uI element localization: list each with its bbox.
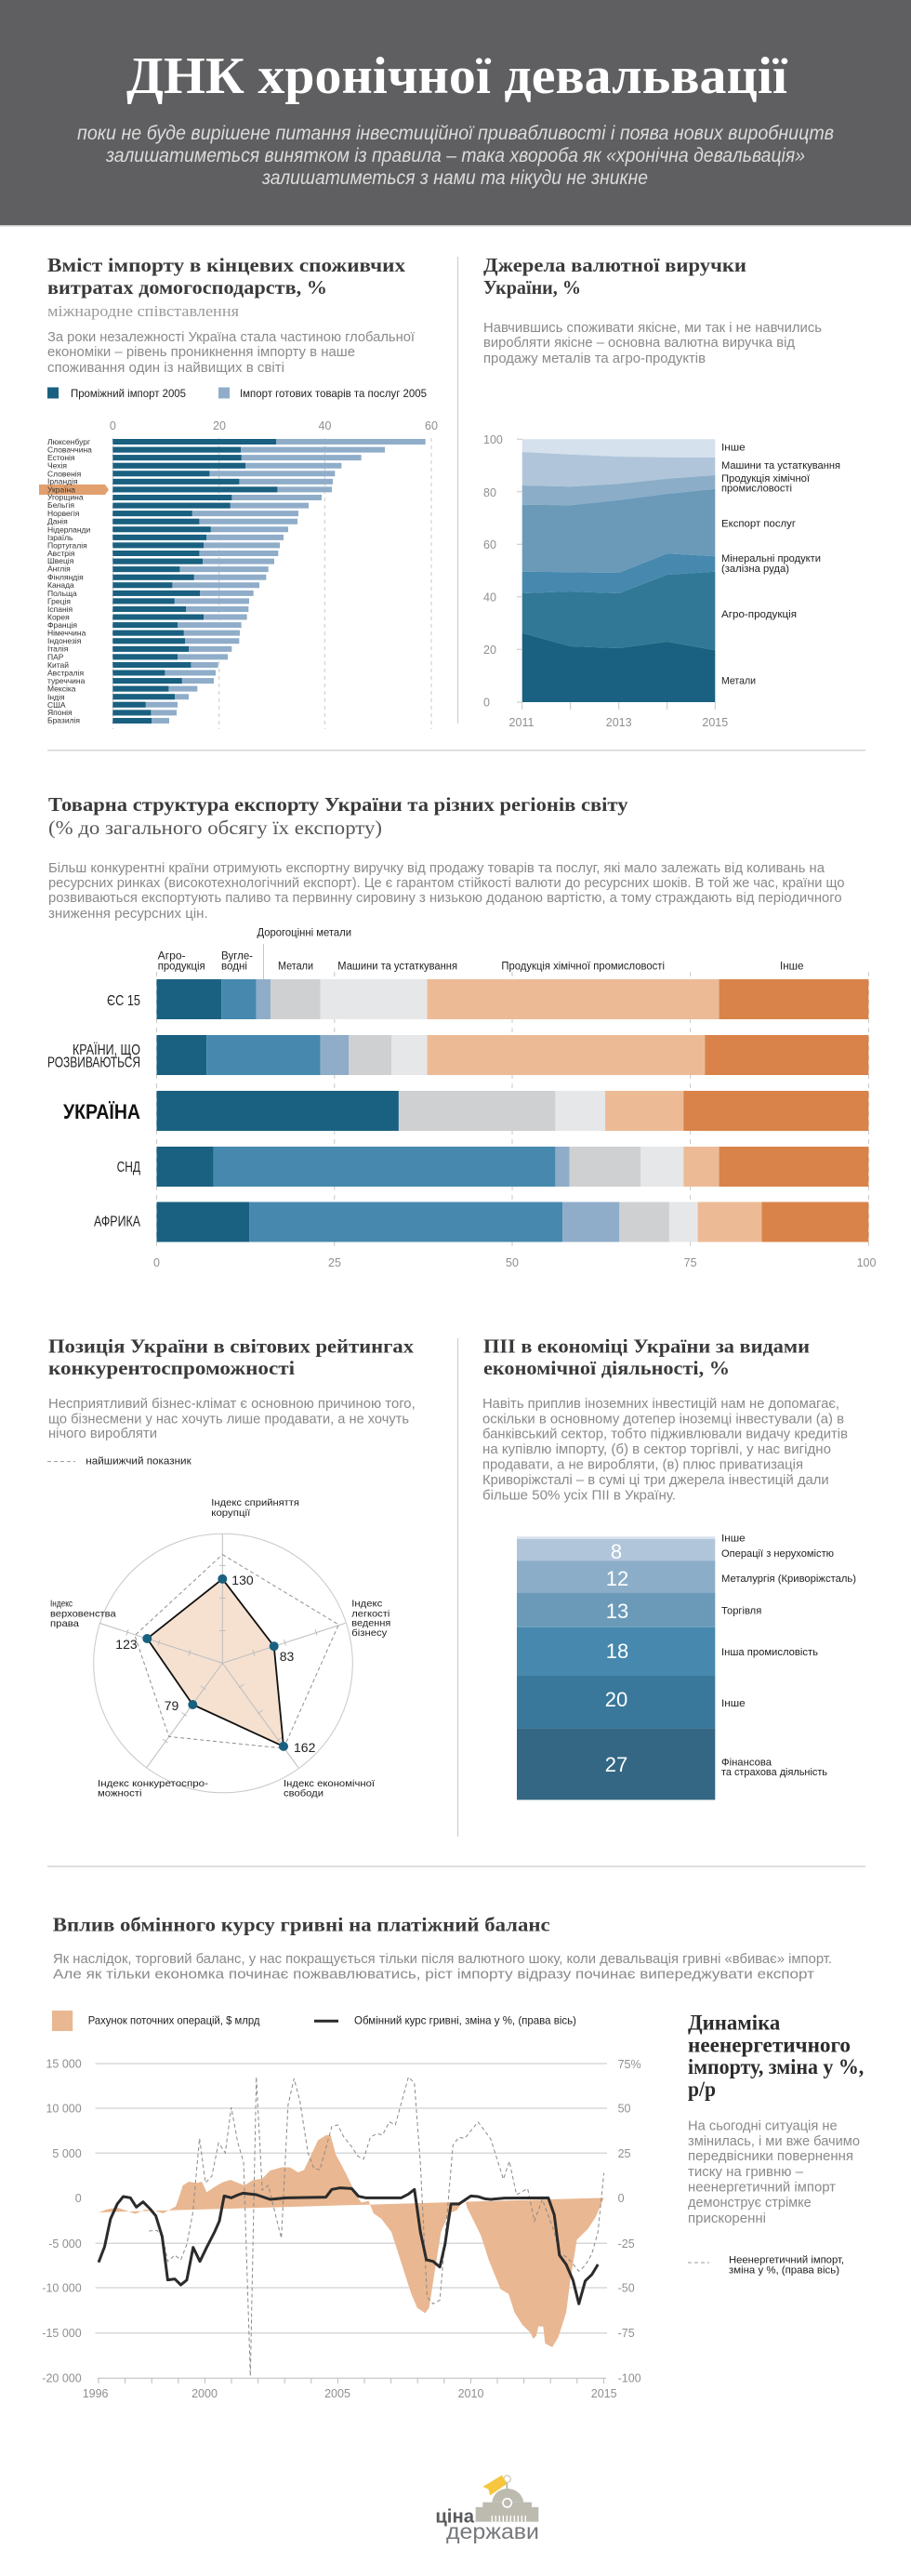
axis labels: легкості <box>351 1609 389 1620</box>
side text: змінилась, і ми вже бачимо <box>688 2134 860 2149</box>
values: 8 <box>611 1540 622 1563</box>
intro text: Більш конкурентні країни отримують експортну виручку від продажу товарів та послуг, які мало залежать від коливань на <box>48 861 825 876</box>
country labels: Угорщина <box>47 493 84 502</box>
x axis labels: 2005 <box>324 2387 350 2400</box>
column labels <box>158 928 803 979</box>
value labels: 83 <box>280 1649 294 1664</box>
series labels: Метали <box>721 675 756 686</box>
axis labels: 25 <box>328 1256 341 1269</box>
panel: FDI by activity <box>482 1334 856 1799</box>
category labels: та страхова діяльність <box>721 1767 827 1778</box>
intro text <box>53 1952 832 1983</box>
x axis labels: 2013 <box>606 716 632 729</box>
series labels: Експорт послуг <box>721 519 796 530</box>
heading: non-energy imports: імпорту, зміна у %, <box>688 2055 864 2078</box>
subheading: міжнародне співставлення <box>47 302 239 320</box>
country labels: США <box>47 700 66 710</box>
country labels: ПАР <box>47 652 64 661</box>
x axis labels <box>83 2387 617 2400</box>
panel: non-energy import dynamics <box>688 2012 864 2277</box>
y axis labels: 60 <box>483 538 496 551</box>
intro text <box>48 1397 416 1441</box>
area: current account <box>99 2135 604 2347</box>
y axis labels: 40 <box>483 591 496 604</box>
category labels: Інша промисловість <box>721 1647 818 1658</box>
axis labels: права <box>50 1618 79 1629</box>
country labels: Японія <box>47 708 73 717</box>
axis labels <box>50 1497 390 1799</box>
country labels: Італія <box>47 644 69 654</box>
side text <box>688 2119 860 2226</box>
category labels: Торгівля <box>721 1605 761 1616</box>
heading: import content: витратах домогосподарств, % <box>47 276 327 299</box>
column labels: Вугле- <box>221 951 253 963</box>
combined line and area chart <box>42 2057 641 2400</box>
x axis labels: 2015 <box>591 2387 617 2400</box>
column labels: Продукція хімічної промисловості <box>501 962 665 973</box>
right axis labels: 25 <box>618 2147 631 2160</box>
heading: export structure: (% до загального обсягу їх експорту) <box>48 817 382 839</box>
y axis labels: 0 <box>483 696 490 709</box>
heading: export structure: Товарна структура експорту України та різних регіонів світу <box>48 793 628 816</box>
country labels: Корея <box>47 613 70 622</box>
panel: sources of foreign currency <box>483 254 840 729</box>
intro text: продавати, а не виробляти, (в) плюс приватизація <box>482 1457 803 1472</box>
category labels: Фінансова <box>721 1758 772 1769</box>
axis labels: 0 <box>153 1256 160 1269</box>
category labels: Операції з нерухомістю <box>721 1548 834 1560</box>
line: hryvnia exchange rate <box>99 2188 598 2304</box>
panel: export structure <box>47 793 876 1269</box>
legend: Імпорт готових товарів та послуг 2005 <box>240 387 427 400</box>
country labels: Індія <box>47 692 65 701</box>
axis labels: свободи <box>284 1787 323 1799</box>
series labels: промисловості <box>721 484 792 495</box>
value labels: 162 <box>294 1740 316 1755</box>
values: 12 <box>606 1567 628 1590</box>
axis labels: ведення <box>351 1618 390 1629</box>
heading: non-energy imports: Динаміка <box>688 2012 781 2035</box>
right axis labels: 75% <box>618 2058 641 2071</box>
country labels: Канада <box>47 580 74 590</box>
x axis labels: 1996 <box>83 2387 109 2400</box>
axis labels: корупції <box>211 1507 250 1519</box>
country labels: Бразилія <box>47 716 80 725</box>
series labels: Мінеральні продукти <box>721 553 821 564</box>
country labels <box>47 437 92 725</box>
right axis labels <box>618 2058 641 2384</box>
axis labels: 50 <box>506 1256 519 1269</box>
legend: Рахунок поточних операцій, $ млрд <box>88 2014 260 2027</box>
icon: price tag <box>482 2476 510 2495</box>
country labels: Люксенбург <box>47 437 90 446</box>
legend: Обмінний курс гривні, зміна у %, (права вісь) <box>354 2014 576 2027</box>
legend: dashed line: Неенергетичний імпорт, <box>729 2254 844 2265</box>
country labels: Фінляндія <box>47 572 84 581</box>
intro text: За роки незалежності Україна стала частиною глобальної <box>47 330 415 345</box>
column labels: водні <box>221 962 247 973</box>
series labels <box>721 443 840 686</box>
x axis labels: 2010 <box>458 2387 483 2400</box>
axis labels: Індекс сприйняття <box>211 1497 299 1508</box>
icon: parliament building <box>476 2483 538 2522</box>
left axis labels: -5 000 <box>48 2237 82 2251</box>
panel: import content in household spending <box>39 254 438 729</box>
right axis labels: 50 <box>618 2102 631 2115</box>
stacked column chart <box>517 1533 856 1799</box>
dashed line: non-energy imports <box>149 2077 604 2376</box>
side text: тиску на гривню – <box>688 2165 804 2180</box>
row labels: КРАЇНИ, ЩО <box>73 1042 140 1058</box>
heading: FDI: ПІІ в економіці України за видами <box>483 1334 810 1357</box>
heading: FDI <box>483 1334 810 1379</box>
intro text: зниження ресурсних цін. <box>48 907 208 922</box>
intro text: Криворіжсталі – в сумі ці три джерела інвестицій дали <box>482 1473 829 1488</box>
country labels: Естонія <box>47 453 75 462</box>
axis labels: Індекс економічної <box>284 1778 375 1789</box>
bar chart: import share by country: 0 <box>110 419 116 432</box>
left axis labels: 10 000 <box>46 2102 82 2115</box>
intro text: Навіть приплив іноземних інвестицій нам не допомагає, <box>482 1397 839 1412</box>
heading: exchange rate impact: Вплив обмінного курсу гривні на платіжний баланс <box>53 1914 550 1936</box>
axis labels: Індекс конкуретоспро- <box>98 1778 209 1789</box>
column labels: Дорогоцінні метали <box>257 928 351 939</box>
legend: Проміжний імпорт 2005 <box>71 387 186 400</box>
title: ДНК хронічної девальвації <box>126 47 787 105</box>
country labels: Австрія <box>47 549 75 558</box>
y axis labels: 80 <box>483 486 496 499</box>
intro text: Але як тільки економка починає пожвавлюватись, ріст імпорту відразу починає випереджувати експорт <box>53 1968 814 1983</box>
stacked bar chart <box>47 972 876 1269</box>
x axis labels: 2000 <box>191 2387 218 2400</box>
country labels: Данія <box>47 517 68 526</box>
value labels: 130 <box>231 1573 254 1587</box>
intro text: Як наслідок, торговий баланс, у нас покращується тільки після валютного шоку, коли девальвація гривні «вбиває» імпорт. <box>53 1952 832 1967</box>
intro text: ресурсних ринках (високотехнологічний експорт). Це є гарантом стійкості валюти до ресурсних шоків. В той же час, країни що <box>48 876 844 891</box>
heading: rankings: конкурентоспроможності <box>48 1357 295 1379</box>
bar: Africa <box>156 1202 868 1242</box>
intro text: Навчившись споживати якісне, ми так і не навчились <box>483 321 822 336</box>
legend <box>52 2011 576 2031</box>
values <box>605 1540 628 1776</box>
axis labels: Індекс <box>351 1598 382 1609</box>
subtitle: залишатиметься з нами та нікуди не зникне <box>261 167 648 189</box>
values: 20 <box>605 1688 627 1711</box>
series labels: Продукція хімічної <box>721 473 810 485</box>
country labels: Ізраїль <box>47 533 73 542</box>
legend: dashed line: зміна у %, (права вісь) <box>729 2265 839 2277</box>
bar: EU 15 <box>156 979 868 1019</box>
heading: non-energy imports <box>688 2012 864 2101</box>
intro text: більше 50% усіх ПІІ в Україну. <box>482 1488 676 1503</box>
side text: прискоренні <box>688 2211 766 2226</box>
row labels: АФРИКА <box>94 1215 140 1229</box>
left axis labels <box>42 2057 82 2384</box>
intro text <box>483 321 822 366</box>
axis labels: 100 <box>857 1256 876 1269</box>
intro text: виробляти якісне – основна валютна виручка від <box>483 336 796 351</box>
legend: dashed line <box>688 2254 844 2277</box>
country labels: Мексіка <box>47 684 76 694</box>
side text: неенергетичний імпорт <box>688 2181 836 2196</box>
left axis labels: -20 000 <box>42 2371 82 2384</box>
axis labels: верховенства <box>50 1609 116 1620</box>
intro text <box>47 330 415 376</box>
bar chart: import share by country: 60 <box>425 419 438 432</box>
intro text: оскільки в основному дотепер іноземці інвестували (а) в <box>482 1412 844 1427</box>
heading: currency sources <box>483 254 746 299</box>
panel: competitiveness rankings <box>47 1334 416 1799</box>
country labels: Польща <box>47 589 77 598</box>
bar chart: import share by country: 40 <box>319 419 331 432</box>
x axis labels: 2011 <box>509 716 534 729</box>
country labels: Китай <box>47 660 69 670</box>
column labels: Інше <box>780 962 803 973</box>
heading: FDI: економічної діяльності, % <box>483 1357 730 1379</box>
right axis labels: -50 <box>618 2282 635 2295</box>
x axis labels <box>509 716 728 729</box>
values: 18 <box>606 1640 628 1663</box>
heading: non-energy imports: р/р <box>688 2078 716 2101</box>
heading: rankings: Позиція України в світових рейтингах <box>48 1334 415 1357</box>
country labels: Чехія <box>47 461 67 471</box>
value labels: 79 <box>165 1698 178 1713</box>
country labels: Норвегія <box>47 509 80 518</box>
intro text: Несприятливий бізнес-клімат є основною причиною того, <box>48 1397 416 1412</box>
intro text: продажу металів та агро-продуктів <box>483 352 706 366</box>
heading: non-energy imports: неенергетичного <box>688 2034 851 2057</box>
series labels: Агро-продукція <box>721 609 797 620</box>
country labels: Англія <box>47 564 71 574</box>
country labels: Португалія <box>47 540 87 550</box>
intro text <box>48 861 844 922</box>
column labels: Агро- <box>158 951 186 963</box>
right axis labels: -25 <box>618 2237 635 2251</box>
radar chart <box>50 1497 390 1799</box>
bar: Ukraine <box>156 1091 868 1131</box>
axis labels: 75 <box>684 1256 697 1269</box>
row labels: РОЗВИВАЮТЬСЯ <box>47 1055 140 1071</box>
heading: import content: Вміст імпорту в кінцевих споживчих <box>47 254 406 276</box>
heading: currency sources: Джерела валютної виручки <box>483 254 746 276</box>
y axis labels: 100 <box>483 433 503 446</box>
category labels: Металургія (Криворіжсталь) <box>721 1573 856 1585</box>
subtitle <box>77 123 834 189</box>
intro text: нічого виробляти <box>48 1427 157 1441</box>
heading: export structure <box>48 793 628 839</box>
right axis labels: 0 <box>618 2192 625 2205</box>
intro text: розвиваються експортують паливо та первинну сировину з низькою доданою вартістю, а тому страждають від періодичного <box>48 891 842 906</box>
country labels: Нідерланди <box>47 524 90 534</box>
wordmark: держави <box>446 2519 539 2543</box>
column labels: Метали <box>278 962 313 973</box>
axis labels <box>153 1256 876 1269</box>
column labels: Машини та устаткування <box>337 962 457 973</box>
highlight: Ukraine <box>39 485 109 495</box>
country labels: Україна <box>47 485 75 494</box>
value labels <box>115 1573 316 1755</box>
logo <box>435 2476 539 2543</box>
country labels: туреччина <box>47 676 86 685</box>
side text: передвісники повернення <box>688 2149 853 2164</box>
row labels: УКРАЇНА <box>63 1100 140 1123</box>
right axis labels: -100 <box>618 2371 641 2384</box>
country labels: Австралія <box>47 669 85 678</box>
intro text: на купівлю імпорту, (б) в сектор торгівлі, у нас вигідно <box>482 1442 831 1457</box>
values: 13 <box>606 1600 628 1623</box>
stacked area chart <box>483 433 840 729</box>
row labels: СНД <box>117 1160 140 1175</box>
heading: currency sources: України, % <box>483 276 581 299</box>
heading: rankings <box>48 1334 415 1379</box>
dashed worst-value outline <box>135 1555 338 1748</box>
y axis labels <box>483 433 503 709</box>
axis labels: бізнесу <box>351 1627 388 1639</box>
bar chart: import share by country <box>39 419 438 729</box>
intro text: що бізнесмени у нас хочуть лише продавати, а не хочуть <box>48 1412 409 1427</box>
country labels: Індонезія <box>47 636 82 645</box>
left axis labels: 15 000 <box>46 2057 82 2070</box>
intro text: банківський сектор, тобто підживлювали видачу кредитів <box>482 1427 848 1441</box>
country labels: Словенія <box>47 469 82 478</box>
row labels: ЄС 15 <box>107 993 140 1009</box>
country labels: Франція <box>47 620 77 630</box>
side text: На сьогодні ситуація не <box>688 2119 838 2134</box>
value labels: 123 <box>115 1637 138 1652</box>
panel: exchange rate and balance of payments <box>42 1914 832 2400</box>
side text: демонструє стрімке <box>688 2196 812 2211</box>
series labels: Машини та устаткування <box>721 460 840 471</box>
country labels: Швеція <box>47 556 74 565</box>
subtitle: поки не буде вирішене питання інвестиційної привабливості і поява нових виробництв <box>77 123 834 144</box>
category labels <box>721 1533 856 1778</box>
x axis labels: 2015 <box>702 716 728 729</box>
legend: найшижчий показник <box>86 1456 191 1467</box>
subtitle: залишатиметься винятком із правила – така хвороба як «хронічна девальвація» <box>105 145 805 166</box>
series labels: (залізна руда) <box>721 564 789 575</box>
heading: import content <box>47 254 406 299</box>
values: 27 <box>605 1753 627 1776</box>
country labels: Ірландія <box>47 476 78 485</box>
intro text: споживання один із найвищих в світі <box>47 361 284 376</box>
Ukraine outline <box>147 1579 284 1746</box>
axis labels: можності <box>98 1787 141 1799</box>
category labels: Інше <box>721 1698 746 1709</box>
axis labels: Індекс <box>50 1598 73 1609</box>
legend <box>47 387 427 400</box>
intro text <box>482 1397 848 1503</box>
right axis labels: -75 <box>618 2327 635 2340</box>
left axis labels: -15 000 <box>42 2327 82 2340</box>
country labels: Бельгія <box>47 500 74 510</box>
header banner <box>0 0 911 227</box>
data points <box>142 1574 288 1751</box>
left axis labels: -10 000 <box>42 2282 82 2295</box>
country labels: Іспанія <box>47 604 73 614</box>
category labels: Інше <box>721 1533 746 1544</box>
row labels <box>47 993 140 1229</box>
wordmark: ціна <box>435 2505 474 2527</box>
series labels: Інше <box>721 443 746 454</box>
bar: developing countries <box>156 1035 868 1075</box>
bar: CIS <box>156 1147 868 1187</box>
y axis labels: 20 <box>483 644 496 657</box>
country labels: Греція <box>47 596 71 605</box>
column labels: продукція <box>158 962 205 973</box>
intro text: економіки – рівень проникнення імпорту в наше <box>47 345 355 360</box>
left axis labels: 5 000 <box>52 2147 82 2160</box>
country labels: Німеччина <box>47 629 86 638</box>
country labels: Словаччина <box>47 445 92 455</box>
left axis labels: 0 <box>75 2192 82 2205</box>
wordmark <box>435 2505 539 2543</box>
bar chart: import share by country: 20 <box>213 419 226 432</box>
